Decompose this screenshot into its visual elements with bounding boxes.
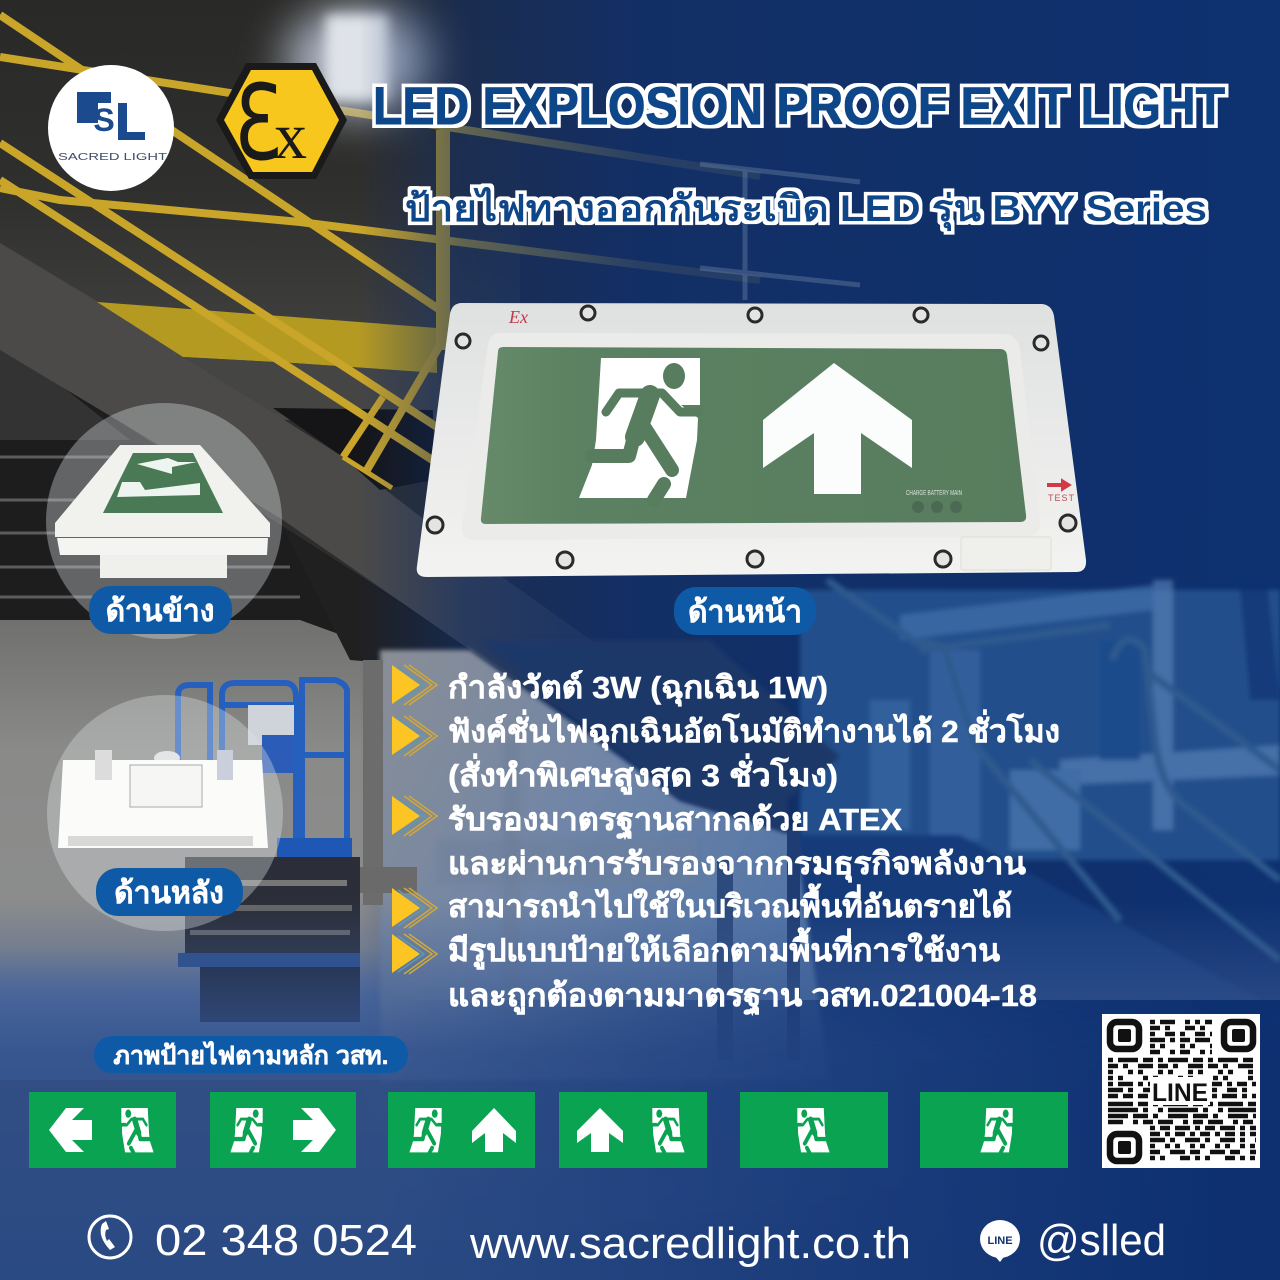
- logo: Sacred Light: S: [93, 102, 115, 138]
- label: side: ด้านข้าง: [106, 595, 214, 628]
- feature list: (สั่งทำพิเศษสูงสุด 3 ชั่วโมง): [448, 753, 838, 795]
- feature list: มีรูปแบบป้ายให้เลือกตามพื้นที่การใช้งาน: [448, 927, 1000, 970]
- product: front view exit light: [417, 303, 1086, 577]
- platform: [97, 302, 437, 373]
- subtitle: ป้ายไฟทางออกกันระเบิด LED รุ่น BYY Series: [405, 186, 1207, 232]
- label: rear: [96, 868, 243, 916]
- icon: Ex hazard hexagon: [216, 62, 347, 184]
- scissor lift: [178, 660, 417, 1022]
- contact: website: www.sacredlight.co.th: [469, 1219, 911, 1268]
- product: front view exit light: Ex: [508, 307, 528, 327]
- contact: phone: 02 348 0524: [155, 1216, 417, 1265]
- feature list: รับรองมาตรฐานสากลด้วย ATEX: [448, 802, 902, 840]
- sign: left arrow, exit: [29, 1092, 176, 1168]
- circle: side view: [46, 403, 282, 639]
- stringer: [0, 243, 760, 800]
- label: signage standard: [94, 1036, 408, 1073]
- feature list: [392, 665, 1060, 1016]
- logo: Sacred Light: SACRED LIGHT: [58, 152, 167, 163]
- circle: rear view: [47, 695, 283, 931]
- QR code: [1102, 1014, 1260, 1168]
- contact: LINE: [980, 1216, 1166, 1265]
- logo: Sacred Light: [48, 65, 174, 191]
- sign: exit: [920, 1092, 1068, 1168]
- label: side: [89, 586, 232, 634]
- feature list: กำลังวัตต์ 3W (ฉุกเฉิน 1W): [448, 670, 828, 707]
- green sign window: [481, 347, 1026, 524]
- green sign window: CHARGE BATTERY MAIN: [906, 490, 962, 497]
- sign: exit, up arrow: [388, 1092, 535, 1168]
- icon: Ex hazard hexagon: Ɛ: [234, 62, 282, 184]
- screws: [427, 306, 1076, 568]
- label: front: [674, 587, 816, 635]
- feature list: และถูกต้องตามมาตรฐาน วสท.021004-18: [448, 978, 1037, 1016]
- icon: Ex hazard hexagon: x: [274, 100, 307, 173]
- feature list: สามารถนำไปใช้ในบริเวณพื้นที่อันตรายได้: [448, 883, 1012, 924]
- right structure: [790, 580, 1280, 1060]
- mid wall: [380, 650, 830, 1080]
- sign: up arrow, exit: [559, 1092, 707, 1168]
- label: rear: ด้านหลัง: [114, 877, 224, 910]
- contact: LINE: LINE: [987, 1235, 1013, 1247]
- product: front view exit light: TEST: [1048, 493, 1075, 503]
- sign: exit, right arrow: [210, 1092, 356, 1168]
- bullet chevrons: [392, 665, 437, 974]
- rails: [0, 15, 760, 488]
- QR code: LINE: [1152, 1079, 1208, 1107]
- feature list: ฟังค์ชั่นไฟฉุกเฉินอัตโนมัติทำงานได้ 2 ชั่วโมง: [448, 709, 1060, 751]
- concrete wall and stairs: [0, 610, 520, 1080]
- label: signage standard: ภาพป้ายไฟตามหลัก วสท.: [113, 1040, 389, 1070]
- label: front: ด้านหน้า: [688, 596, 802, 629]
- sign: exit mirrored: [740, 1092, 888, 1168]
- contact: LINE: @slled: [1037, 1216, 1166, 1265]
- feature list: และผ่านการรับรองจากกรมธุรกิจพลังงาน: [448, 846, 1026, 883]
